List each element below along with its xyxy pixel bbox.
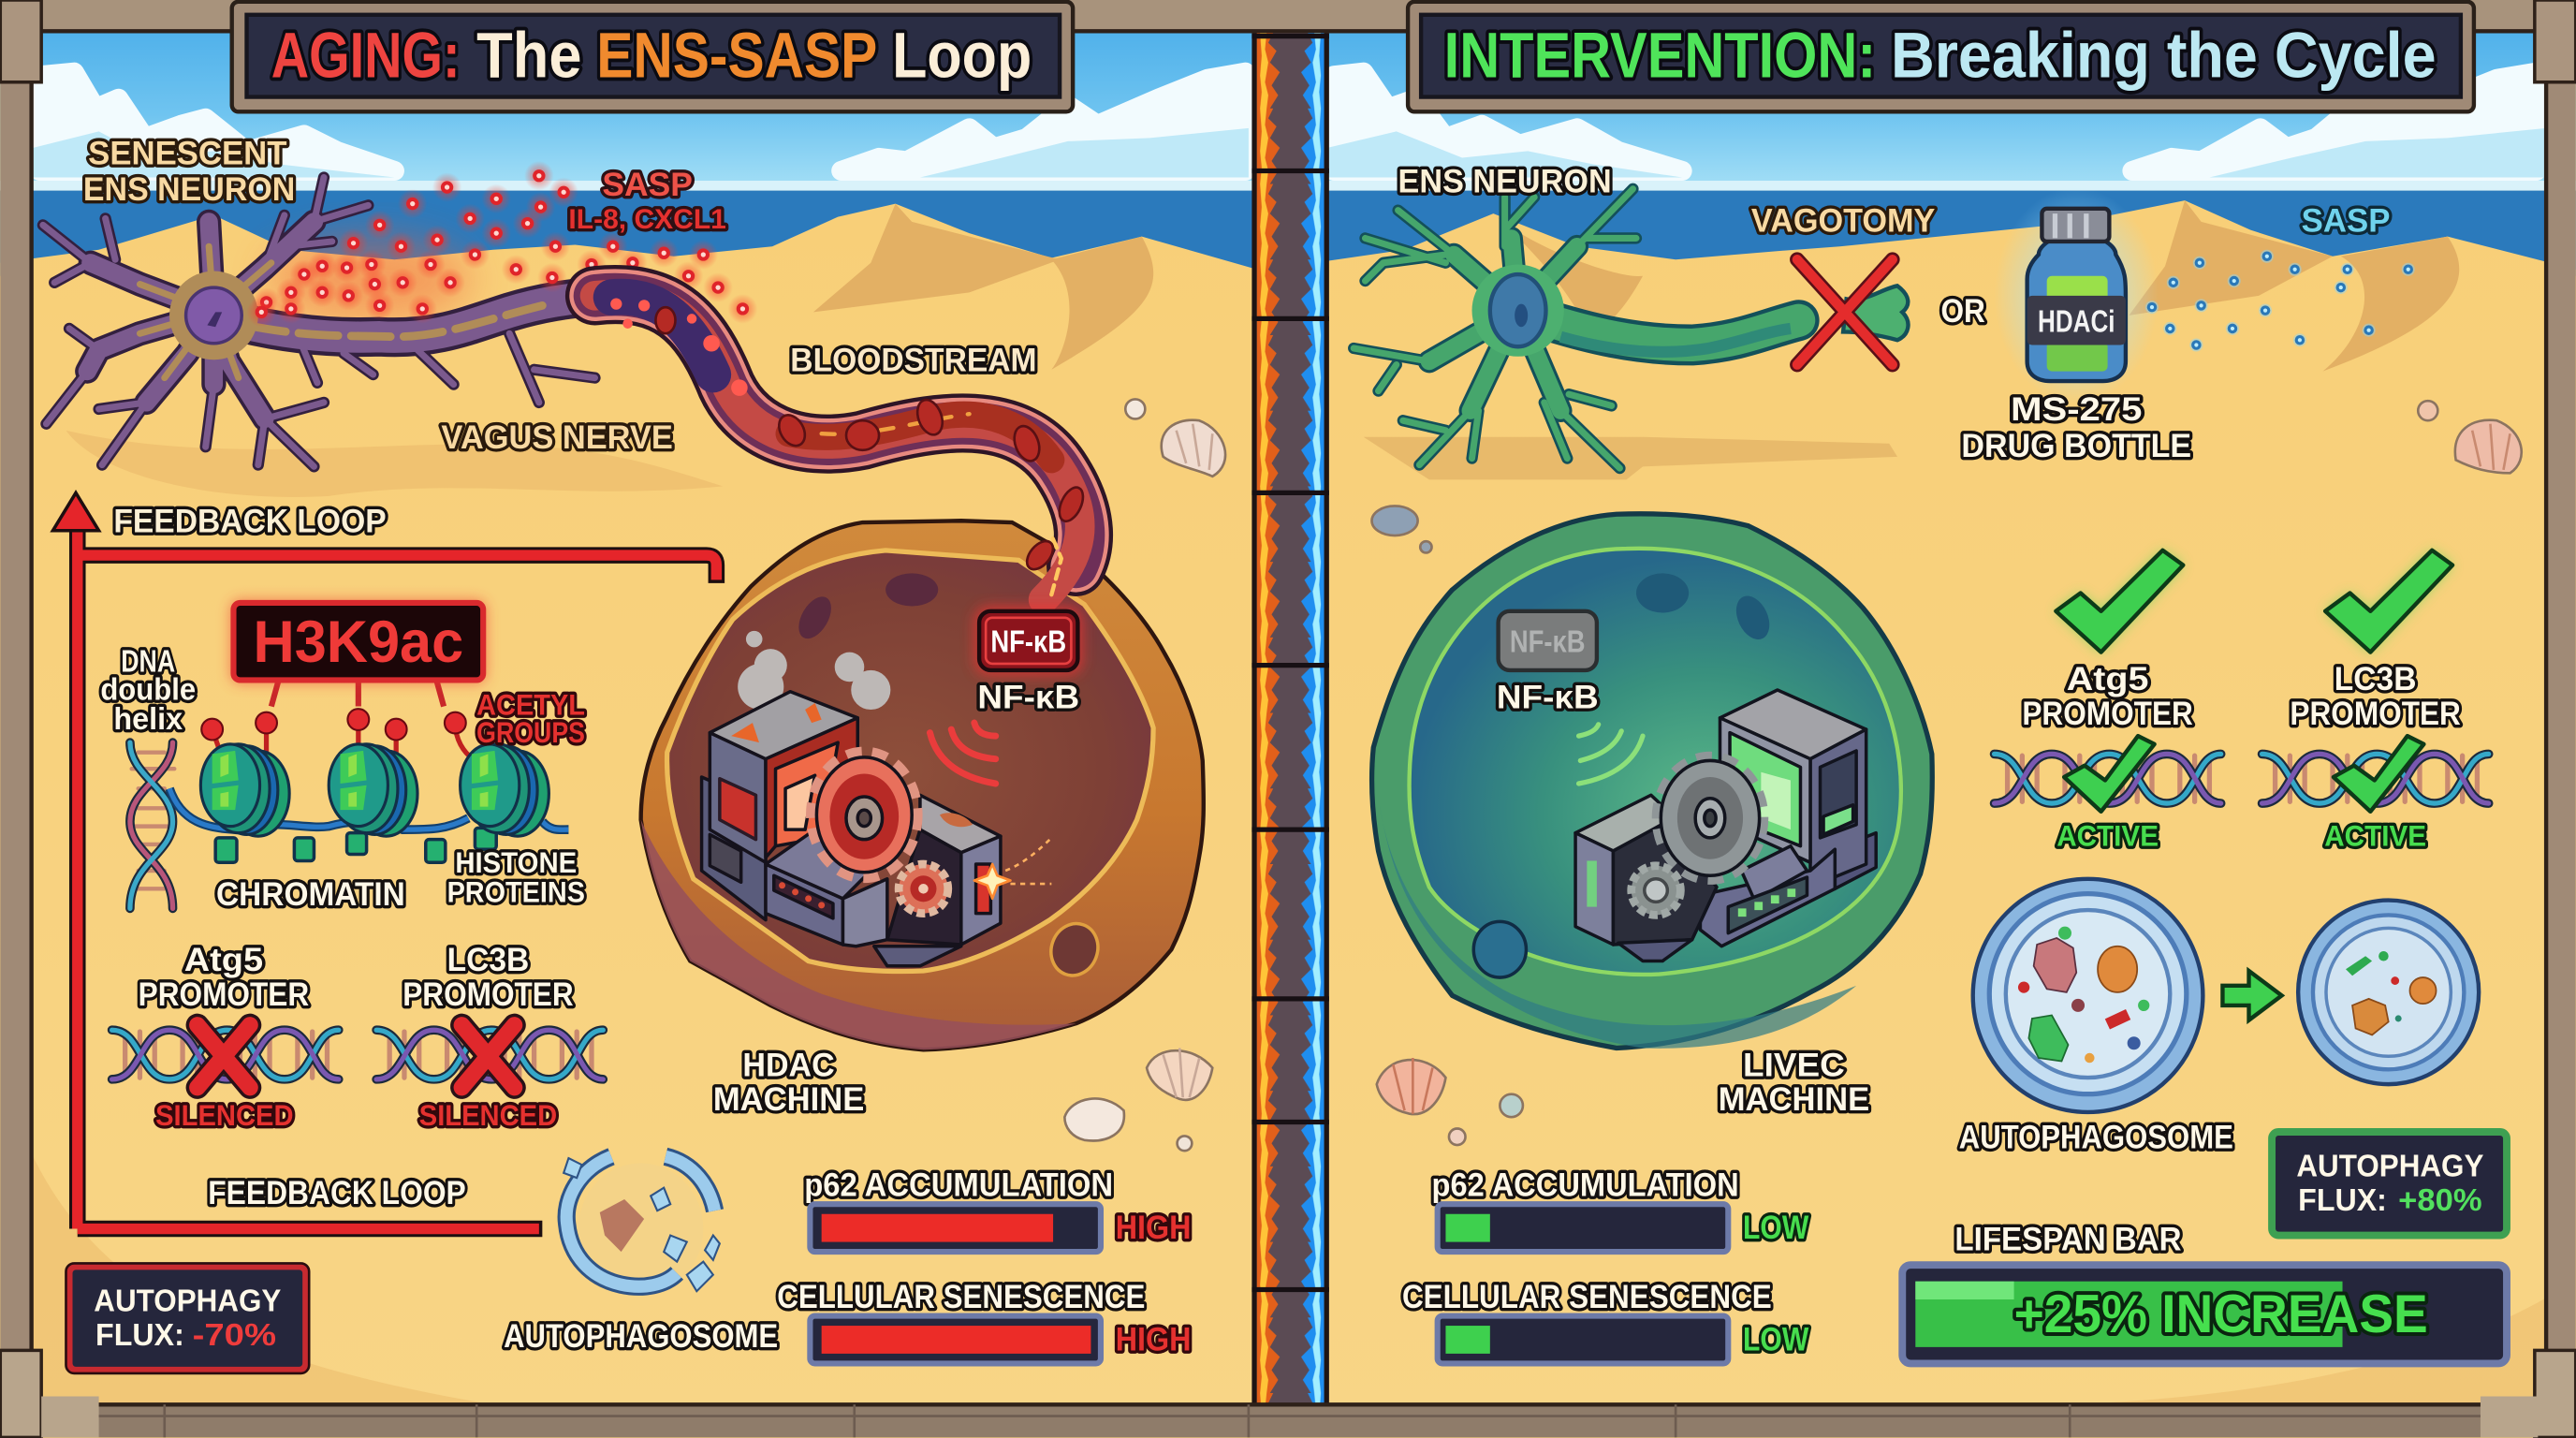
cellular senescence bar aged: CELLULAR SENESCENCE bbox=[777, 1279, 1145, 1315]
background: cloud shading bbox=[33, 128, 2546, 178]
histone proteins label: HISTONE bbox=[455, 845, 577, 879]
bloodstream label: BLOODSTREAM bbox=[790, 343, 1037, 379]
cellular senescence bar healthy: LOW bbox=[1743, 1321, 1809, 1357]
signal arcs bbox=[929, 723, 996, 784]
label: dna double helix: DNA bbox=[121, 645, 175, 680]
sasp label: SASP bbox=[602, 167, 693, 203]
cellular senescence bar aged: HIGH bbox=[1116, 1321, 1191, 1357]
livec machine bbox=[1575, 690, 1876, 961]
title banner: intervention bbox=[1408, 2, 2474, 111]
autophagy flux box right: FLUX: bbox=[2298, 1183, 2387, 1218]
left block bbox=[1575, 795, 1676, 851]
atg5 promoter active: ACTIVE bbox=[2056, 819, 2159, 853]
label: dna double helix bbox=[100, 645, 196, 737]
lc3b promoter silenced bbox=[376, 942, 603, 1132]
hdac machine bbox=[702, 631, 1051, 966]
title banner: intervention: INTERVENTION: bbox=[1444, 19, 1876, 91]
p62 bar aged bbox=[804, 1167, 1191, 1252]
atg5 promoter silenced: PROMOTER bbox=[139, 976, 309, 1013]
nf-kb badge inactive: NF-κB bbox=[1510, 625, 1586, 660]
label: ms-275: DRUG BOTTLE bbox=[1961, 428, 2191, 464]
smoke bbox=[738, 631, 890, 723]
p62 bar healthy bbox=[1432, 1167, 1809, 1252]
autophagy flux box right: +80% bbox=[2398, 1183, 2482, 1218]
title banner: aging: ENS-SASP bbox=[596, 19, 877, 91]
atg5 promoter active bbox=[1995, 550, 2221, 853]
livec machine label bbox=[1719, 1047, 1869, 1118]
labels left top bbox=[83, 135, 295, 208]
feedback loop label top: FEEDBACK LOOP bbox=[113, 504, 387, 540]
sasp particles bbox=[247, 161, 757, 327]
lc3b promoter active: LC3B bbox=[2334, 661, 2416, 697]
arrow: green bbox=[2222, 971, 2282, 1020]
nf-kb badge aged bbox=[974, 606, 1083, 675]
sasp label: IL-8, CXCL1 bbox=[568, 204, 726, 235]
livec machine label: LIVEC bbox=[1743, 1047, 1845, 1083]
h3k9ac badge bbox=[230, 599, 487, 707]
red blood cells bbox=[655, 307, 1088, 574]
label: nf-kb right: NF-κB bbox=[1497, 679, 1599, 715]
title banner: aging: AGING: bbox=[271, 19, 461, 91]
label: nf-kb: NF-κB bbox=[977, 679, 1079, 715]
cellular senescence bar healthy: CELLULAR SENESCENCE bbox=[1402, 1279, 1772, 1315]
nf-kb badge inactive bbox=[1499, 611, 1597, 670]
atg5 promoter silenced bbox=[112, 942, 339, 1132]
sasp label right: SASP bbox=[2302, 202, 2390, 239]
title banner: aging: Loop bbox=[892, 19, 1032, 91]
labels left top: ENS NEURON bbox=[83, 171, 295, 208]
autophagosome large bbox=[1973, 879, 2203, 1112]
autophagy flux box left bbox=[66, 1263, 309, 1373]
dna double helix vertical bbox=[130, 742, 174, 908]
hdac machine label bbox=[713, 1047, 864, 1118]
healthy neuron bbox=[1354, 189, 1909, 468]
nucleus bbox=[1490, 274, 1545, 346]
lc3b promoter active bbox=[2262, 550, 2489, 853]
p62 bar healthy: p62 ACCUMULATION bbox=[1432, 1167, 1739, 1203]
chromatin strand and nucleosomes bbox=[169, 709, 568, 862]
hdaci drug bottle bbox=[1995, 187, 2159, 404]
sasp glow bbox=[268, 237, 472, 322]
cell: aged with hdac machine bbox=[641, 521, 1204, 1049]
histone proteins label: PROTEINS bbox=[447, 874, 585, 908]
title banner: aging bbox=[232, 2, 1073, 111]
senescent neuron bbox=[43, 178, 600, 466]
lifespan bar bbox=[1902, 1221, 2507, 1363]
feedback loop label bottom: FEEDBACK LOOP bbox=[208, 1175, 466, 1211]
title banner: intervention: Breaking the Cycle bbox=[1891, 19, 2437, 91]
p62 bar aged: HIGH bbox=[1116, 1210, 1191, 1246]
nf-kb badge aged: NF-κB bbox=[990, 625, 1066, 660]
big gear bbox=[813, 754, 915, 875]
atg5 promoter active: Atg5 bbox=[2067, 661, 2148, 697]
cut nerve stub bbox=[1843, 286, 1909, 340]
title banner: aging: The bbox=[476, 19, 581, 91]
right block bbox=[920, 795, 1001, 853]
pebbles and shells right bbox=[1371, 401, 2522, 1145]
autophagy flux box left: AUTOPHAGY bbox=[94, 1284, 281, 1318]
vagotomy x bbox=[1797, 259, 1893, 365]
center divider: lava and electric wall bbox=[1251, 33, 1329, 1404]
autophagy flux box right bbox=[2272, 1132, 2507, 1236]
autophagy flux box left: -70% bbox=[193, 1318, 276, 1353]
autophagosome broken bbox=[564, 1156, 720, 1295]
lifespan bar: LIFESPAN BAR bbox=[1954, 1221, 2182, 1257]
cellular senescence bar aged bbox=[777, 1279, 1191, 1363]
labels left top: SENESCENT bbox=[88, 135, 287, 171]
autophagosome label left: AUTOPHAGOSOME bbox=[504, 1318, 778, 1355]
lc3b promoter active: PROMOTER bbox=[2290, 696, 2461, 732]
label: dna double helix: double bbox=[100, 673, 196, 708]
acetyl groups label: GROUPS bbox=[476, 715, 585, 749]
signal arcs bbox=[1579, 725, 1643, 784]
autophagosome label right: AUTOPHAGOSOME bbox=[1959, 1120, 2233, 1156]
hdac machine label: HDAC bbox=[742, 1047, 835, 1083]
histone proteins label bbox=[447, 845, 585, 908]
feedback loop arrow bbox=[52, 492, 716, 1229]
label: ms-275 bbox=[1961, 391, 2191, 464]
small gear bbox=[1632, 866, 1680, 915]
hdac machine label: MACHINE bbox=[713, 1081, 864, 1118]
h3k9ac badge: H3K9ac bbox=[254, 609, 463, 675]
acetyl groups label: ACETYL bbox=[476, 687, 585, 721]
labels right top: ENS NEURON bbox=[1398, 163, 1612, 199]
atg5 promoter silenced: SILENCED bbox=[155, 1098, 294, 1132]
label: dna double helix: helix bbox=[113, 702, 183, 737]
bloodstream vessel bbox=[595, 295, 1088, 599]
atg5 promoter silenced: Atg5 bbox=[184, 942, 263, 978]
background: clouds bbox=[39, 72, 2537, 170]
vagus nerve label: VAGUS NERVE bbox=[441, 419, 673, 456]
lc3b promoter silenced: LC3B bbox=[447, 942, 529, 978]
pebbles and shells left bbox=[1064, 399, 1225, 1151]
p62 bar aged: p62 ACCUMULATION bbox=[804, 1167, 1113, 1203]
lc3b promoter active: ACTIVE bbox=[2324, 819, 2426, 853]
small gear bbox=[899, 864, 948, 914]
lifespan bar: +25% INCREASE bbox=[2014, 1284, 2428, 1344]
livec machine label: MACHINE bbox=[1719, 1081, 1869, 1118]
acetyl groups label bbox=[476, 687, 585, 749]
autophagy flux box left: FLUX: bbox=[95, 1318, 184, 1353]
cellular senescence bar healthy bbox=[1402, 1279, 1809, 1363]
hdaci drug bottle: HDACi bbox=[2038, 304, 2115, 339]
p62 bar healthy: LOW bbox=[1743, 1210, 1809, 1246]
nucleus bbox=[186, 287, 242, 344]
sasp particles reduced bbox=[2145, 250, 2415, 352]
chromatin label: CHROMATIN bbox=[216, 876, 405, 913]
background: sky bbox=[0, 0, 2576, 191]
autophagy flux box right: AUTOPHAGY bbox=[2296, 1149, 2483, 1183]
background: ocean bbox=[0, 191, 2576, 276]
autophagosome small bbox=[2298, 901, 2479, 1084]
sasp label bbox=[568, 167, 726, 235]
sparks bbox=[974, 864, 1010, 899]
atg5 promoter active: PROMOTER bbox=[2022, 696, 2193, 732]
label: ms-275: MS-275 bbox=[2011, 391, 2142, 428]
vagotomy label: VAGOTOMY bbox=[1751, 202, 1935, 239]
big gear bbox=[1660, 759, 1761, 877]
cell: restored with livec machine bbox=[1371, 514, 1932, 1049]
lc3b promoter silenced: PROMOTER bbox=[402, 976, 574, 1013]
lc3b promoter silenced: SILENCED bbox=[419, 1098, 557, 1132]
or label: OR bbox=[1941, 293, 1985, 330]
